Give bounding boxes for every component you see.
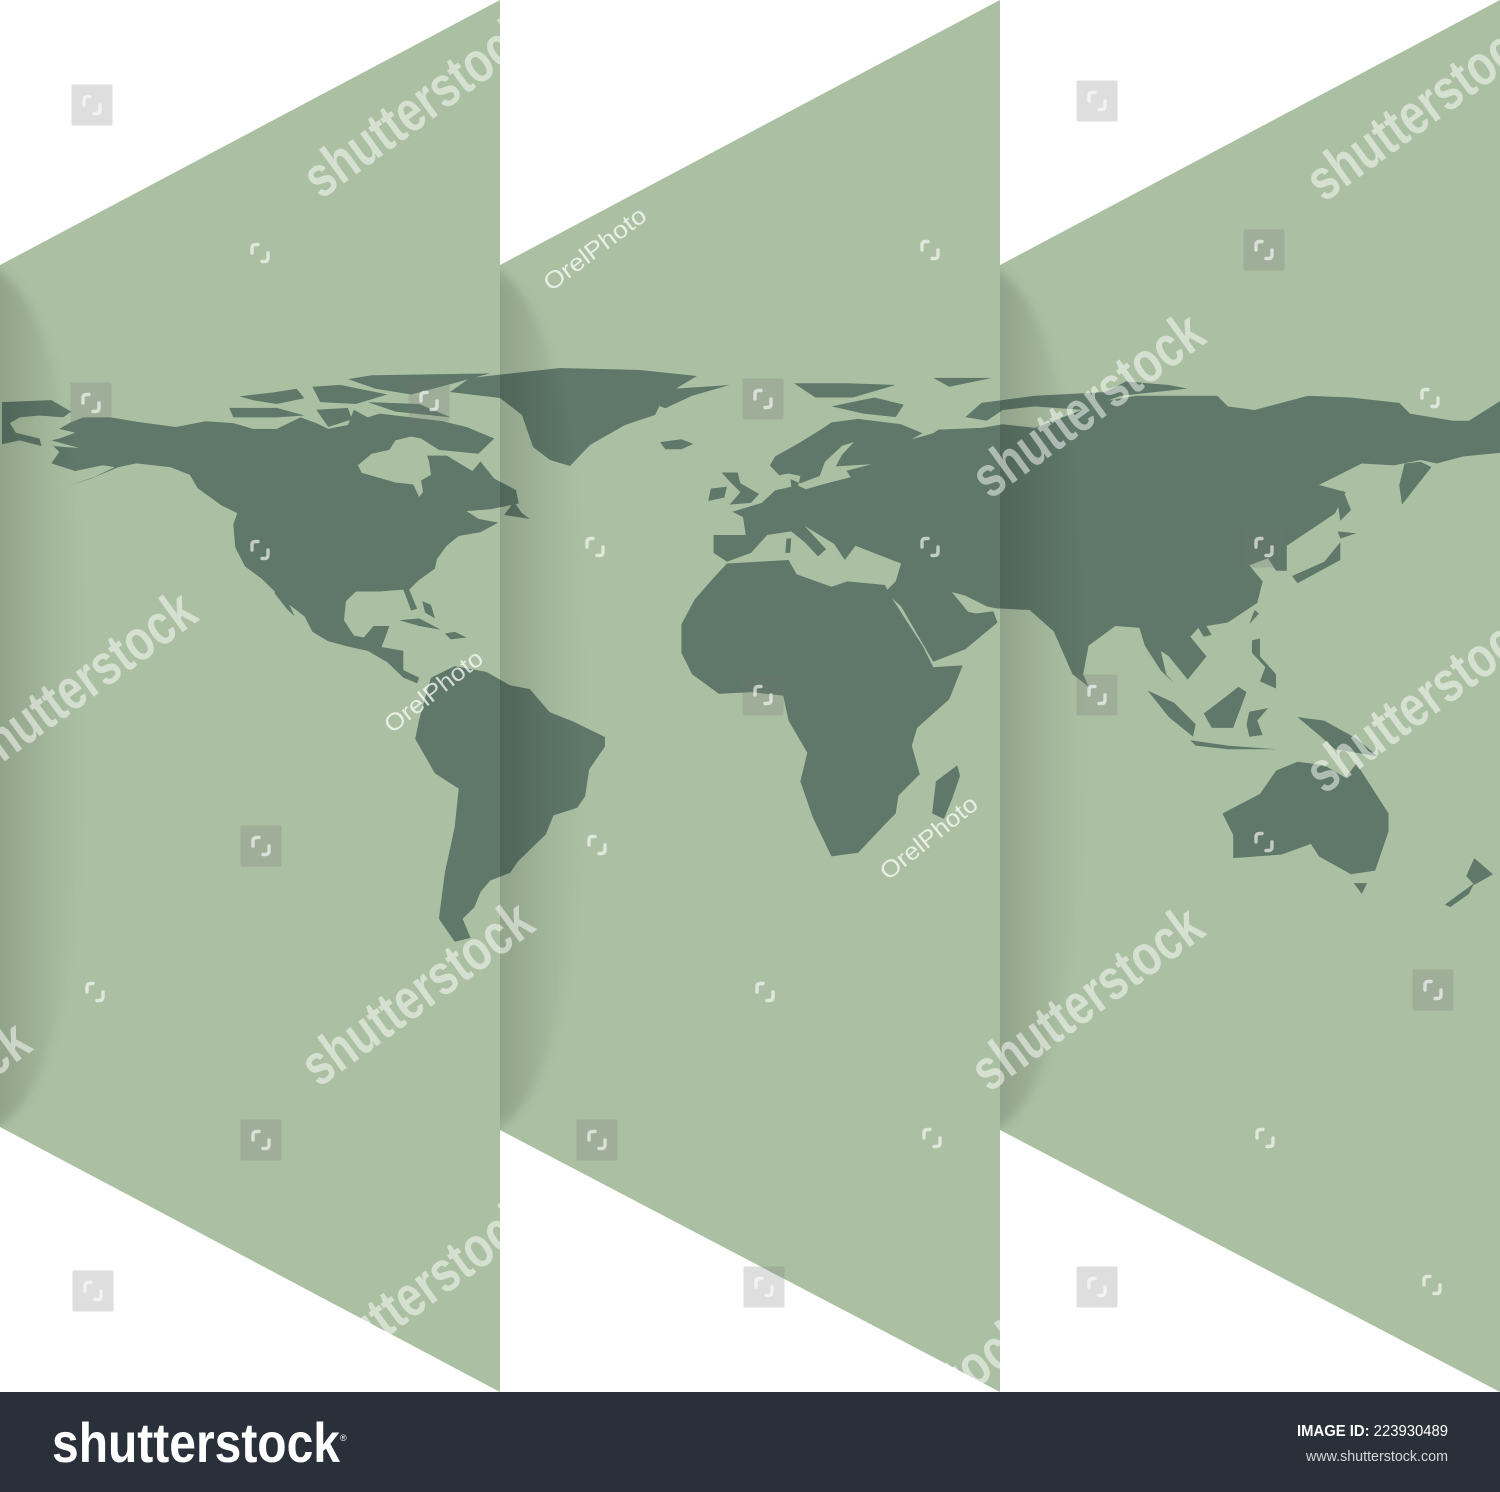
- watermark: shutterstock wordmarks: shutterstock: [959, 299, 1217, 511]
- watermark: shutterstock wordmarks: shutterstock: [290, 1184, 548, 1396]
- footer bar: [0, 1392, 1500, 1492]
- footer logo: shutterstock: [52, 1411, 341, 1474]
- watermark: contributor name: OrelPhoto: [538, 202, 652, 297]
- watermark: square logo badges: [70, 80, 1454, 1312]
- map: Americas: [2, 373, 605, 942]
- watermark: contributor name: [379, 202, 983, 886]
- footer: image id: IMAGE ID: 223930489: [1297, 1423, 1448, 1440]
- fold shadow: left panel: [0, 268, 52, 1128]
- watermark: contributor name: OrelPhoto: [875, 790, 983, 886]
- watermark: shutterstock wordmarks: shutterstock: [288, 887, 546, 1099]
- watermark: small logo marks: [87, 92, 1440, 1294]
- watermark: shutterstock wordmarks: shutterstock: [958, 892, 1216, 1104]
- fold shadow: middle panel: [500, 268, 552, 1130]
- watermark: contributor name: OrelPhoto: [379, 645, 489, 739]
- panel: middle fold: [500, 0, 1000, 1392]
- panel: left fold: [0, 0, 500, 1392]
- panel: right fold: [1000, 0, 1500, 1392]
- map: Eurasia, Africa and Oceania: [660, 376, 1500, 907]
- fold shadow: right panel: [1000, 268, 1054, 1130]
- map: Greenland: [450, 368, 697, 466]
- footer: website: www.shutterstock.com: [1305, 1448, 1448, 1465]
- footer: registered mark: ®: [340, 1433, 347, 1443]
- world map: [2, 368, 1500, 942]
